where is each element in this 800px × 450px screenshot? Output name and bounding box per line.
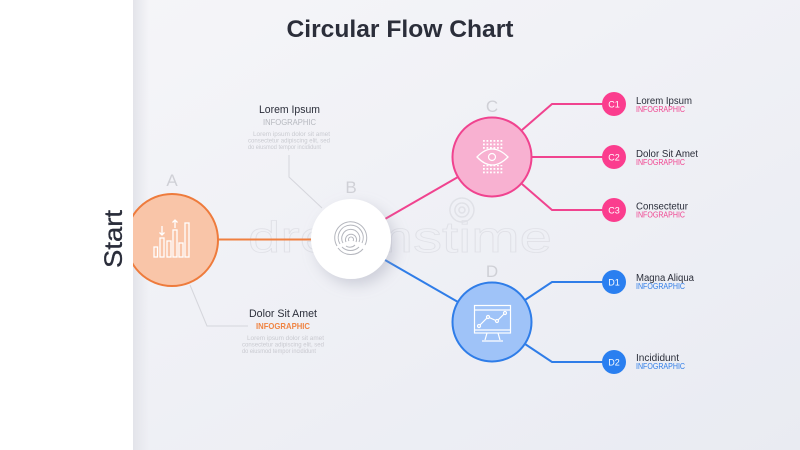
label D2: INFOGRAPHIC (636, 362, 685, 371)
text block: Dolor Sit Amet note: INFOGRAPHIC (256, 321, 310, 331)
icon: monitor with line chart (474, 306, 510, 341)
badge C1 (602, 92, 626, 116)
letter B: B (345, 178, 357, 197)
text block: Lorem Ipsum note: do eiusmod tempor incididunt (248, 145, 321, 151)
label D2: Incididunt (636, 353, 679, 364)
start label: Start (100, 210, 128, 268)
connector: B to C (385, 177, 458, 219)
text block: Dolor Sit Amet note (242, 308, 324, 355)
label C1: INFOGRAPHIC (636, 105, 685, 114)
text block: Lorem Ipsum note: Lorem ipsum dolor sit amet (253, 132, 330, 138)
label C2 (636, 149, 698, 167)
badge D2 (602, 350, 626, 374)
label D1: Magna Aliqua (636, 273, 694, 284)
label C3: INFOGRAPHIC (636, 210, 685, 220)
badge C3 (602, 198, 626, 222)
node D (452, 282, 532, 362)
label D1: INFOGRAPHIC (636, 282, 685, 291)
connectors: D branches (525, 282, 604, 362)
badge C3: C3 (608, 206, 620, 216)
title: Circular Flow Chart (286, 16, 514, 43)
icon: fingerprint (335, 222, 367, 255)
badge C2 (602, 145, 626, 169)
label D1 (636, 273, 694, 291)
watermark (248, 198, 552, 262)
label C3: Consectetur (636, 202, 689, 212)
left panel (0, 0, 133, 450)
node A (126, 194, 218, 286)
badge C1: C1 (608, 100, 620, 110)
connectors: C branches (522, 104, 604, 210)
connector: B to D (385, 260, 458, 302)
letter C: C (486, 97, 498, 116)
label C1: Lorem Ipsum (636, 96, 692, 107)
icon: bar chart with arrows (154, 220, 189, 257)
label D2 (636, 353, 685, 371)
text block: Dolor Sit Amet note: do eiusmod tempor incididunt (242, 349, 316, 355)
icon: eye with dot grid (477, 139, 508, 175)
text block: Dolor Sit Amet note: Lorem ipsum dolor sit amet (247, 336, 324, 342)
text block: Dolor Sit Amet note: Dolor Sit Amet (249, 308, 317, 320)
label C2: INFOGRAPHIC (636, 158, 685, 167)
badge D1: D1 (608, 278, 620, 288)
badge D1 (602, 270, 626, 294)
connector: A to B (218, 238, 315, 240)
leader line: B note (289, 155, 322, 208)
badge C2: C2 (608, 152, 620, 162)
text block: Dolor Sit Amet note: consectetur adipiscing elit, sed (242, 342, 324, 348)
watermark: dreamstime (248, 213, 552, 262)
label C2: Dolor Sit Amet (636, 149, 698, 160)
letter A: A (166, 171, 178, 190)
badge D2: D2 (608, 358, 620, 368)
text block: Lorem Ipsum note (248, 104, 330, 151)
text block: Lorem Ipsum note: consectetur adipiscing elit, sed (248, 138, 330, 144)
leader line: A note (190, 285, 248, 326)
label C1 (636, 96, 692, 114)
node B (311, 199, 391, 279)
letter D: D (486, 262, 498, 281)
label C3 (636, 202, 689, 220)
node C (452, 118, 532, 196)
text block: Lorem Ipsum note: INFOGRAPHIC (263, 117, 316, 127)
text block: Lorem Ipsum note: Lorem Ipsum (259, 104, 320, 116)
